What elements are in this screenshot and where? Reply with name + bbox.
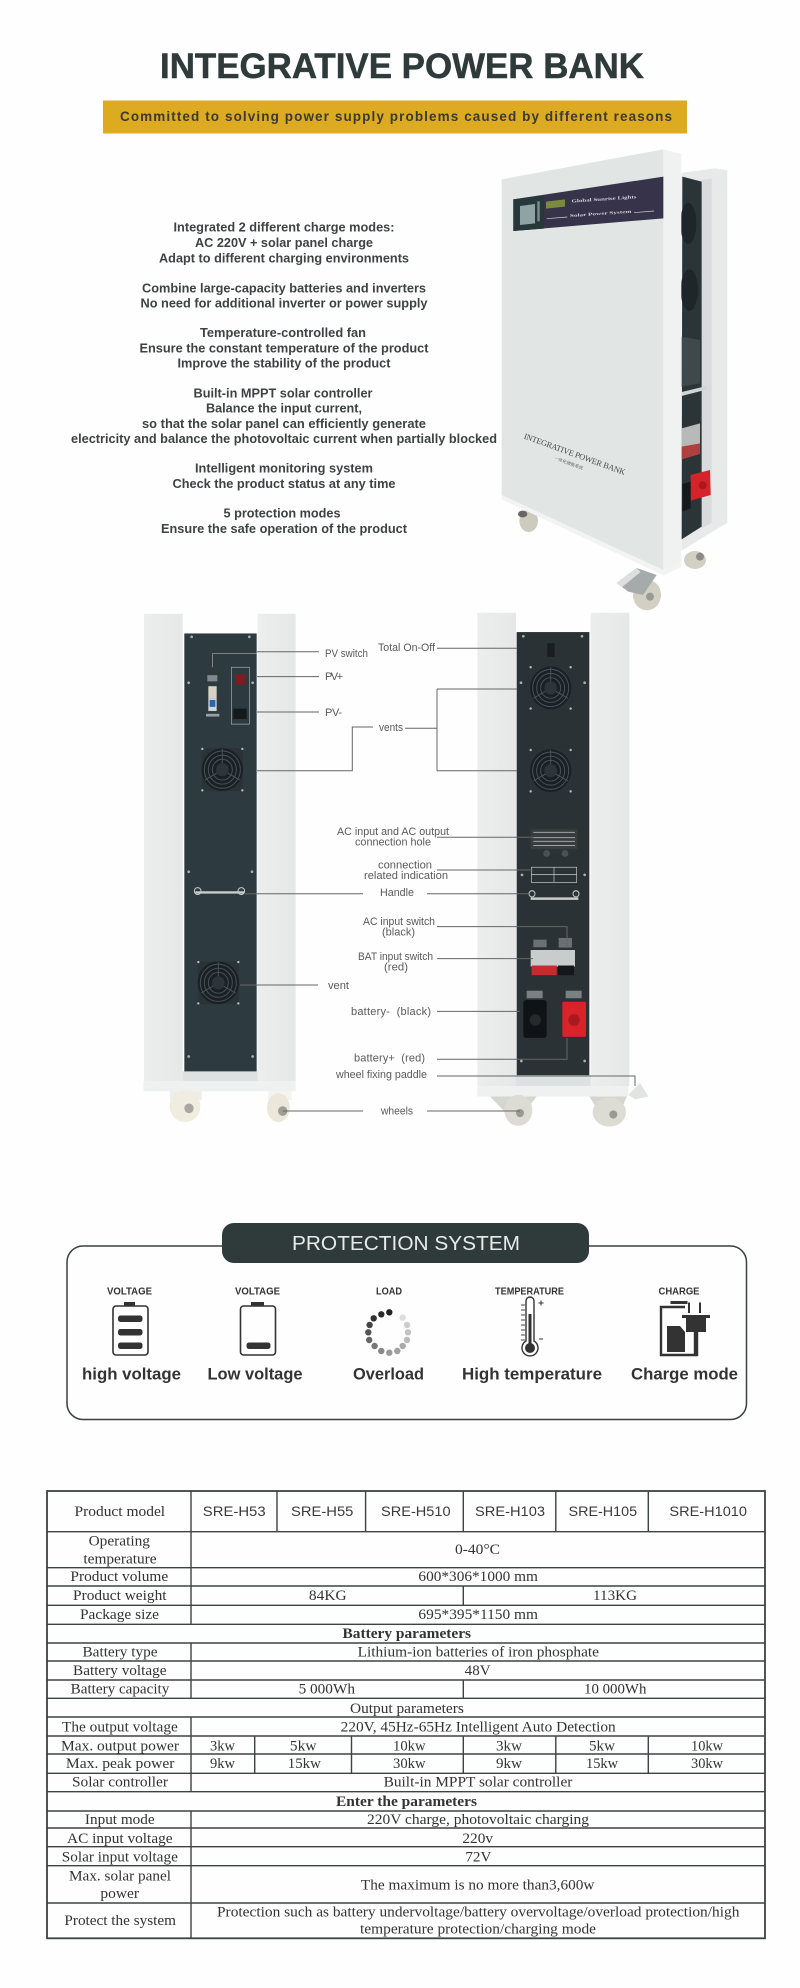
side control panel (680, 177, 711, 539)
table text: 15kw (586, 1756, 618, 1772)
wheel and brake paddle (617, 568, 661, 610)
table text: 600*306*1000 mm (418, 1569, 538, 1585)
item: charge mode: Charge mode (631, 1366, 738, 1384)
table text: Battery capacity (71, 1682, 170, 1698)
table text: 9kw (210, 1756, 235, 1772)
table text: 3kw (210, 1738, 235, 1754)
item: low voltage: VOLTAGE (235, 1286, 280, 1298)
callout labels: connection (378, 860, 432, 872)
table text: Solar input voltage (62, 1850, 178, 1866)
protection system heading: PROTECTION SYSTEM (292, 1233, 520, 1255)
callout labels: (black) (382, 926, 415, 938)
subtitle banner (103, 100, 687, 134)
feature text block: Built-in MPPT solar controller (194, 386, 373, 400)
table text: Built-in MPPT solar controller (384, 1774, 572, 1790)
callout labels: PV- (325, 707, 342, 719)
table grid (47, 1491, 765, 1938)
callout labels: wheel fixing paddle (335, 1069, 427, 1081)
table text: Max. output power (61, 1738, 179, 1754)
table text: AC input voltage (67, 1831, 173, 1847)
table text: 9kw (496, 1756, 522, 1772)
printed product name: INTEGRATIVE POWER BANK (523, 432, 627, 477)
feature text block: electricity and balance the photovoltaic current when partially blocked (71, 432, 497, 446)
feature text block: Ensure the safe operation of the product (161, 522, 408, 536)
table text: Battery parameters (343, 1626, 471, 1642)
item: high voltage: VOLTAGE (107, 1286, 152, 1298)
callout labels: (red) (384, 962, 408, 974)
table text (61, 1503, 747, 1938)
item: low voltage: Low voltage (208, 1366, 302, 1384)
table text: 72V (465, 1850, 492, 1866)
fan: upper vent (201, 748, 243, 792)
product photo: angled view (502, 149, 727, 610)
table text: Max. solar panel (69, 1868, 171, 1884)
rear wheel (684, 551, 706, 569)
table text: 695*395*1150 mm (418, 1607, 538, 1623)
table text: SRE-H510 (381, 1503, 451, 1519)
wheels (170, 1090, 292, 1122)
display band: Solar Power System (570, 209, 632, 218)
table text: 48V (465, 1663, 491, 1679)
table text: Product weight (73, 1588, 167, 1604)
item: high temperature: TEMPERATURE (495, 1286, 564, 1298)
callout labels (325, 642, 449, 1118)
table text: Battery voltage (73, 1663, 167, 1679)
table text: 220V, 45Hz-65Hz Intelligent Auto Detection (341, 1720, 616, 1736)
item: charge mode: CHARGE (658, 1286, 700, 1298)
feature text block: 5 protection modes (224, 506, 341, 520)
table text: temperature (83, 1552, 157, 1568)
table text: 30kw (393, 1756, 426, 1772)
fan: vent two (529, 749, 572, 793)
table text: Product volume (70, 1569, 168, 1585)
table text: Protection such as battery undervoltage/battery overvoltage/overload protection/high (217, 1904, 740, 1920)
title: INTEGRATIVE POWER BANK (160, 46, 644, 86)
connection indication table (531, 867, 577, 882)
item: overload: Overload (353, 1366, 424, 1384)
callout labels: Handle (380, 887, 414, 899)
feature text block: Check the product status at any time (172, 477, 396, 491)
screws (520, 635, 586, 1062)
callout labels: related indication (364, 870, 448, 882)
table text: SRE-H105 (569, 1503, 637, 1519)
table text: Enter the parameters (336, 1794, 477, 1810)
table text: 30kw (691, 1756, 723, 1772)
PV switch module (206, 653, 257, 717)
table text: 113KG (593, 1588, 637, 1604)
item: high voltage: high voltage (82, 1366, 181, 1384)
item: low voltage (208, 1286, 302, 1384)
table text: 5kw (589, 1738, 615, 1754)
callout labels: PV+ (325, 671, 343, 683)
item: overload (353, 1286, 424, 1384)
table text: 0-40°C (455, 1542, 500, 1558)
table text: Output parameters (350, 1701, 464, 1717)
table text: Max. peak power (66, 1756, 174, 1772)
callout labels: AC input switch (363, 916, 435, 928)
feature text block: Temperature-controlled fan (200, 326, 366, 340)
table text: Solar controller (72, 1774, 168, 1790)
rear side frame (682, 168, 727, 551)
product photo: right rear view (477, 613, 648, 1127)
specification table (47, 1491, 765, 1938)
callout labels: PV switch (325, 648, 368, 660)
dark panel (517, 632, 589, 1075)
fan: vent one (529, 666, 572, 710)
feature text block (71, 220, 497, 536)
callout labels: vent (328, 980, 349, 992)
table text: Input mode (85, 1812, 155, 1828)
table text: 3kw (496, 1738, 522, 1754)
front side strip (663, 149, 681, 575)
table text: 5kw (290, 1738, 317, 1754)
table text: Product model (74, 1504, 165, 1520)
item: high voltage (82, 1286, 181, 1384)
table text: Battery type (82, 1644, 158, 1660)
callout labels: Total On-Off (378, 642, 436, 654)
battery plus socket (562, 991, 586, 1037)
callout labels: BAT input switch (358, 951, 433, 963)
fan: lower vent (197, 961, 239, 1005)
table text: 15kw (288, 1756, 321, 1772)
table text: 10kw (691, 1738, 723, 1754)
front left wheel (518, 509, 538, 532)
table text: The output voltage (62, 1720, 178, 1736)
table text: SRE-H55 (291, 1503, 354, 1519)
table text: The maximum is no more than3,600w (361, 1878, 595, 1894)
leader lines (240, 648, 635, 1111)
PV terminals (231, 667, 249, 724)
total switch (547, 643, 555, 657)
printed product name: 一体化储能系统 (553, 455, 585, 472)
display band: Global Sunrise Lights (571, 195, 637, 205)
feature text block: Intelligent monitoring system (195, 462, 373, 476)
callout labels: connection hole (355, 836, 431, 848)
table text: SRE-H103 (475, 1503, 545, 1519)
feature text block: Balance the input current, (206, 402, 362, 416)
feature text block: Combine large-capacity batteries and inverters (142, 282, 426, 296)
handle (194, 888, 245, 894)
front face (502, 149, 663, 570)
panel: protection system (67, 1223, 746, 1420)
protection system heading (222, 1223, 589, 1263)
table text: 10kw (393, 1738, 426, 1754)
wheels (490, 1095, 627, 1127)
callout labels: AC input and AC output (337, 826, 449, 838)
callout labels: battery- (black) (351, 1006, 431, 1018)
table text: 220v (462, 1831, 494, 1847)
bottom strip (502, 495, 681, 575)
item: high temperature (462, 1286, 602, 1384)
table text: 10 000Wh (584, 1682, 647, 1698)
breakers (531, 938, 575, 975)
item: high temperature: High temperature (462, 1366, 602, 1384)
table text: 84KG (309, 1588, 347, 1604)
table text: Operating (89, 1534, 151, 1550)
table text: Protect the system (64, 1913, 176, 1929)
product photo: left rear view (143, 614, 296, 1122)
screws (187, 636, 254, 1058)
feature text block: AC 220V + solar panel charge (195, 236, 373, 250)
wheel paddle (628, 1083, 648, 1099)
table text: power (100, 1886, 139, 1902)
item: overload: LOAD (376, 1286, 402, 1298)
feature text block: No need for additional inverter or power supply (140, 296, 428, 310)
AC connection label (531, 829, 577, 857)
feature text block: Integrated 2 different charge modes: (174, 220, 394, 234)
table text: SRE-H1010 (669, 1503, 747, 1519)
table text: 220V charge, photovoltaic charging (367, 1812, 590, 1828)
feature text block: Ensure the constant temperature of the product (140, 342, 429, 356)
display band (513, 177, 663, 231)
table text: Lithium-ion batteries of iron phosphate (358, 1644, 599, 1660)
table text: 5 000Wh (299, 1682, 355, 1698)
callout labels: battery+ (red) (354, 1052, 425, 1064)
table text: SRE-H53 (203, 1503, 266, 1519)
feature text block: Adapt to different charging environments (159, 252, 409, 266)
battery minus socket (523, 991, 547, 1038)
dark panel (184, 633, 257, 1071)
handle (529, 891, 579, 899)
feature text block: Improve the stability of the product (178, 356, 391, 370)
callout labels: wheels (380, 1106, 413, 1118)
item: charge mode (631, 1286, 738, 1384)
feature text block: so that the solar panel can efficiently generate (142, 417, 426, 431)
table text: Package size (80, 1607, 159, 1623)
callout labels: vents (379, 722, 403, 734)
table text: temperature protection/charging mode (360, 1922, 596, 1938)
subtitle banner: Committed to solving power supply problems caused by different reasons (120, 109, 672, 124)
